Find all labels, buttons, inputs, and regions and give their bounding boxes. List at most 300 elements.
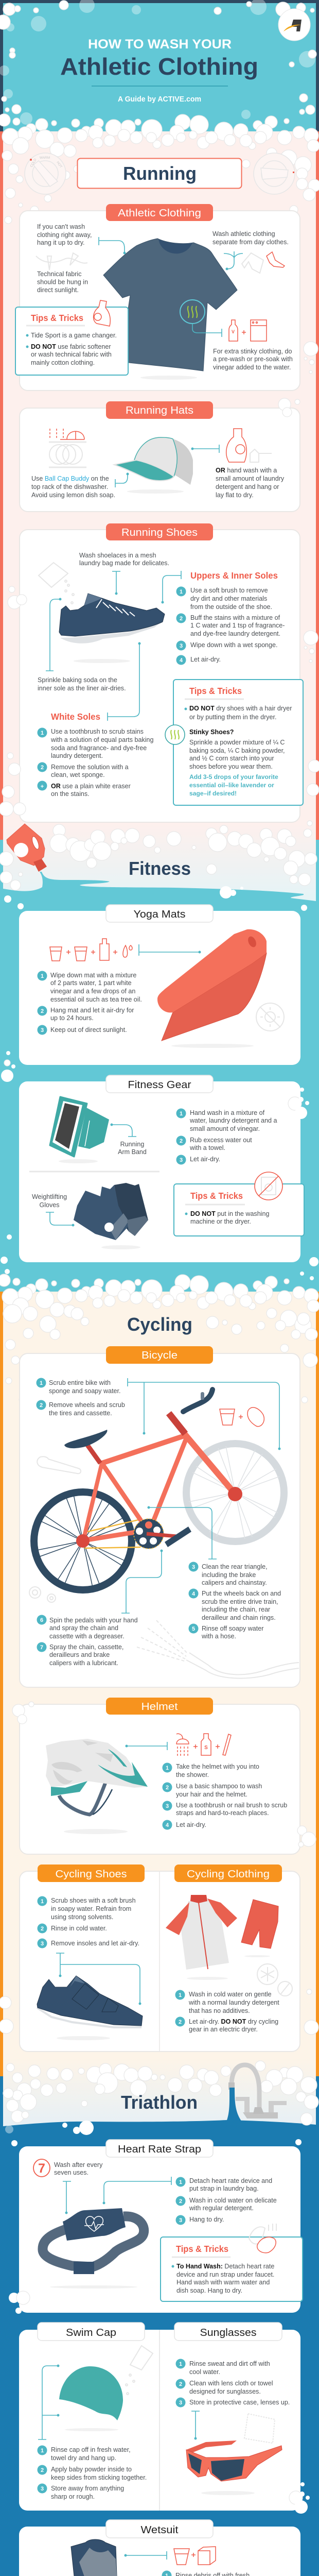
heading: Uppers and Inner Soles: Uppers & Inner Soles (190, 570, 278, 581)
tips box: mainly cotton clothing. (31, 359, 95, 366)
text: stinky: For extra stinky clothing, do (213, 348, 292, 355)
text: hang dry: clothing right away, (37, 231, 92, 239)
steps 3-5: Rinse off soapy water (202, 1625, 263, 1632)
steps 3-5: 3 (192, 1564, 195, 1570)
tips box: put in the washing (216, 1210, 269, 1217)
icon: wrench (37, 1456, 81, 1473)
icon: cold wash (257, 1964, 278, 1985)
steps: yoga: Wipe down mat with a mixture (50, 972, 136, 979)
steps: yoga: Keep out of direct sunlight. (50, 1026, 127, 1033)
icon: number seven (33, 2159, 50, 2177)
illustration: heart rate strap (43, 2208, 144, 2289)
pill heading (106, 1075, 213, 1093)
steps: cycling shoes: 2 (41, 1926, 44, 1932)
text: technical fabric: direct sunlight. (37, 286, 79, 294)
steps: cycling shoes: Remove insoles and let air-dry. (51, 1940, 139, 1947)
steps: helmet: 3 (166, 1803, 169, 1809)
text: hang dry: hang it up to dry. (37, 239, 85, 246)
icon: vinegar and washer (229, 320, 267, 341)
text: hand wash: detergent and hang or (216, 483, 279, 490)
title (60, 37, 258, 104)
steps: cycling clothing: 1 (179, 1992, 182, 1998)
connector: separate (224, 251, 243, 270)
text: hand wash: small amount of laundry (216, 475, 285, 482)
tips box: Sprinkle a powder mixture of ¼ C (189, 739, 285, 746)
steps: uppers: and dye-free laundry detergent. (190, 630, 280, 637)
connector: steps (103, 2177, 171, 2204)
tips box: baking soda, ¼ C baking powder, (189, 747, 285, 754)
text: sprinkle: Sprinkle baking soda on the (38, 676, 117, 684)
steps: helmet (163, 1763, 287, 1830)
steps: helmet: your hair and the helmet. (176, 1791, 247, 1798)
panel: Running Hats (20, 401, 300, 512)
illustration: cycling jersey (166, 1895, 237, 1980)
heading: White Soles: White Soles (51, 711, 100, 722)
connector: sunglasses (191, 2411, 200, 2440)
steps 6-7: and spray the chain and (49, 1624, 118, 1632)
steps: cycling shoes: 3 (41, 1941, 44, 1947)
connector: wetsuit (125, 2551, 167, 2560)
steps: uppers: 4 (180, 657, 183, 664)
steps 3-5: including the brake (202, 1571, 256, 1579)
icon: powder bottle (126, 2346, 153, 2395)
steps 3-5 (188, 1562, 281, 1640)
heading: Fitness: Fitness (129, 858, 191, 879)
pill heading: Cycling Clothing (187, 1869, 270, 1880)
steps: white soles: on the stains. (51, 790, 90, 798)
steps 1-2: 1 (40, 1380, 43, 1386)
icon: sock (267, 252, 285, 267)
heading: Triathlon: Triathlon (121, 2092, 198, 2113)
text: stinky: vinegar added to the water. (213, 364, 291, 371)
tips box (15, 307, 128, 375)
pill heading (106, 401, 213, 419)
steps: gear: Rub excess water out (190, 1137, 252, 1144)
steps 6-7: 7 (40, 1645, 43, 1651)
icon: number seven: 7 (38, 2161, 45, 2176)
illustration: sunglasses (186, 2441, 282, 2495)
tips box: or by putting them in the dryer. (189, 714, 276, 721)
icon: nuts (29, 1587, 56, 1602)
icon: hose (137, 1620, 299, 1679)
steps 3-5: 5 (192, 1626, 195, 1632)
icon: temperature dial: HOT (56, 161, 63, 168)
steps: gear: 1 (180, 1111, 183, 1117)
pill heading: Cycling Shoes (56, 1869, 127, 1880)
icon: temperature dial (25, 153, 66, 194)
label: arm band: Arm Band (118, 1148, 147, 1156)
connector: white soles (108, 642, 141, 721)
steps 1-2: sponge and soapy water. (49, 1387, 121, 1395)
illustration: yoga mat (157, 929, 267, 1048)
handlebar (183, 1389, 212, 1412)
steps: sunglasses: Clean with lens cloth or towel (189, 2380, 273, 2387)
steps: gear: water, laundry detergent and a (189, 1117, 277, 1124)
text: wash frequency: seven uses. (54, 2169, 88, 2176)
steps: sunglasses: designed for sunglasses. (189, 2388, 261, 2395)
steps: yoga (37, 971, 142, 1035)
tips box: Tips & Tricks (31, 313, 83, 323)
illustration: cycling shorts (241, 1900, 278, 1957)
heading: Running (77, 159, 242, 189)
steps 3-5: 4 (192, 1591, 196, 1597)
steps: swim cap: towel dry and hang up. (51, 2454, 116, 2462)
text: ball cap buddy: Use (31, 475, 45, 482)
steps: cycling shoes: in soapy water. Refrain from (51, 1905, 131, 1912)
connector: arm band (110, 1123, 136, 1137)
steps: heart rate: put strap in laundry bag. (189, 2185, 259, 2192)
bubbles: fitness foam (0, 821, 317, 911)
label: gloves: Gloves (39, 1201, 60, 1209)
icon: faucet (226, 2065, 287, 2122)
steps 3-5: derailleur and chain rings. (202, 1614, 276, 1621)
connector: hand wash (191, 445, 219, 453)
steps: sunglasses (176, 2359, 290, 2407)
panel: Wetsuit (19, 2520, 301, 2576)
steps: cycling clothing: Wash in cold water on gentle (189, 1991, 272, 1998)
illustration: cycling shoe (37, 1976, 143, 2040)
pill heading: Fitness Gear (128, 1079, 191, 1091)
tips box: To Hand Wash: (176, 2263, 223, 2270)
icon: shower shampoo brush (176, 1734, 231, 1757)
text: sprinkle: inner sole as the liner air-dries. (38, 685, 126, 692)
steps 1-2 (36, 1378, 125, 1417)
pill heading (106, 1698, 213, 1715)
steps: white soles (37, 727, 154, 798)
steps: heart rate: 1 (179, 2179, 182, 2185)
icon: temperature dial: COLD (30, 158, 38, 168)
text: shoelaces: Wash shoelaces in a mesh (79, 552, 156, 559)
tips box: dish soap. Hang to dry. (176, 2287, 242, 2294)
steps: cycling shoes (37, 1896, 139, 1948)
icon: lens cloth (244, 2414, 275, 2443)
icon: detergent (94, 300, 110, 326)
steps: uppers (176, 586, 285, 665)
pill heading (106, 2140, 213, 2157)
connector: mat (139, 944, 201, 956)
illustration: hat (114, 437, 193, 494)
steps 3-5: Clean the rear triangle, (202, 1563, 268, 1570)
steps: uppers: 1 C water and 1 tsp of fragrance- (190, 622, 285, 629)
steps: gear (176, 1109, 277, 1164)
steps: gear: small amount of vinegar. (190, 1125, 260, 1132)
tips box (165, 680, 303, 805)
steps: heart rate: Detach heart rate device and (189, 2177, 272, 2184)
steps: cycling shoes: 1 (41, 1899, 44, 1905)
pill heading: Swim Cap (66, 2327, 116, 2338)
steps: cycling clothing: Let air-dry. (189, 2018, 221, 2025)
steps: heart rate: Hang to dry. (189, 2216, 224, 2223)
steps 3-5: Put the wheels back on and (202, 1590, 281, 1597)
steps: heart rate (176, 2177, 277, 2225)
tips box: use fabric softener (56, 343, 111, 350)
steps: yoga: 1 (41, 973, 44, 979)
icon: cycle dial (254, 153, 295, 194)
pill heading: Running Shoes (121, 527, 198, 538)
pill heading (38, 2323, 145, 2341)
steps: white soles: use a plain white eraser (61, 783, 131, 790)
text: ball cap buddy: top rack of the dishwasher. (31, 483, 108, 490)
icon: no washer (255, 1172, 282, 1200)
connector: laces (112, 571, 120, 595)
steps: cycling shoes: Scrub shoes with a soft brush (51, 1897, 136, 1904)
steps 3-5: including the chain, rear (202, 1606, 270, 1613)
steps: heart rate: Wash in cold water on delicate (189, 2197, 277, 2204)
steps 6-7 (37, 1615, 138, 1667)
steps 6-7: Spray the chain, cassette, (49, 1643, 123, 1651)
steps 3-5: with a hose. (201, 1633, 236, 1640)
steps: sunglasses: 1 (179, 2361, 182, 2367)
tips box: sage–if desired! (189, 790, 237, 797)
steps: yoga: Hang mat and let it air-dry for (50, 1007, 134, 1014)
steps 1-2: Scrub entire bike with (49, 1379, 111, 1386)
pill heading: Helmet (141, 1701, 178, 1713)
tips box (174, 1184, 304, 1236)
text: hand wash: lay flat to dry. (216, 492, 254, 499)
panel: Athletic Clothing (15, 204, 300, 391)
front wheel (186, 1444, 284, 1541)
illustration: t-shirt (103, 239, 237, 380)
hubs (76, 1487, 242, 1548)
tips box: DO NOT (31, 343, 56, 350)
steps: swim cap: Store away from anything (51, 2485, 124, 2492)
connector: uppers (162, 571, 181, 604)
tips box: Hand wash with warm water and (176, 2279, 270, 2286)
bubbles: teal dots (1, 1051, 318, 1280)
text: technical fabric: Technical fabric (37, 270, 81, 278)
connector: cycling shoe (56, 1953, 141, 2005)
steps: heart rate: 2 (179, 2198, 182, 2205)
tips box (161, 2237, 303, 2301)
steps: heart rate: 3 (179, 2217, 182, 2224)
steps: sunglasses: Store in protective case, lenses up. (189, 2399, 290, 2406)
pill heading: Running Hats (126, 405, 193, 416)
steps 1-2: Remove wheels and scrub (49, 1401, 125, 1409)
label: arm band: Running (120, 1141, 144, 1148)
steps: gear: 2 (180, 1138, 183, 1144)
steps: yoga: of 2 parts water, 1 part white (50, 979, 132, 987)
steps: white soles: clean, wet sponge. (51, 771, 105, 778)
icon: mixture (50, 939, 132, 961)
panel: Yoga Mats (19, 905, 300, 1065)
steps: yoga: up to 24 hours. (50, 1014, 94, 1022)
illustration: running shoe (59, 594, 165, 663)
saddle (64, 1430, 107, 1448)
connector: rear triangle (147, 1506, 217, 1559)
steps: swim cap: 3 (41, 2486, 44, 2492)
steps: white soles: soda and fragrance- and dye-free (51, 744, 147, 752)
chain (84, 1520, 140, 1548)
stem and seatpost (87, 1413, 185, 1463)
steps: swim cap: Apply baby powder inside to (51, 2466, 132, 2473)
steps: white soles: 1 (41, 730, 44, 736)
text: stinky: a pre-wash or pre-soak with (213, 355, 293, 363)
steps: uppers: from the outside of the shoe. (190, 603, 272, 611)
steps: cycling clothing: with a normal laundry detergent (188, 1999, 279, 2006)
steps: cycling clothing: gear in an electric dryer. (189, 2026, 258, 2033)
text: separate: separate from day clothes. (212, 239, 289, 246)
steps: uppers: 2 (180, 616, 183, 622)
steps: helmet: 1 (166, 1765, 169, 1771)
steps: cycling clothing: DO NOT dry cycling (221, 2018, 278, 2025)
panel: Heart Rate Strap (19, 2140, 303, 2313)
pill heading (38, 1865, 145, 1882)
title: A Guide by ACTIVE.com (118, 95, 201, 104)
tips box: Tide Sport is a game changer. (31, 332, 117, 339)
icon: baking soda box (39, 563, 74, 604)
steps: sunglasses: Rinse sweat and dirt off with (189, 2360, 270, 2367)
icon: cup and sponge (220, 1408, 264, 1427)
header bubbles (0, 0, 319, 224)
steps: wetsuit (162, 2571, 269, 2576)
steps: cycling clothing (175, 1990, 279, 2033)
icon: shorts (242, 253, 263, 273)
steps 6-7: calipers with a lubricant. (49, 1659, 118, 1667)
steps: uppers: Use a soft brush to remove (190, 587, 268, 594)
steps: helmet: 4 (166, 1822, 169, 1828)
steps: cycling shoes: Rinse in cold water. (51, 1925, 107, 1932)
steps: swim cap: 2 (41, 2467, 44, 2473)
icon: vinegar and washer: V (232, 329, 235, 334)
tips box: and ½ C corn starch into your (189, 755, 274, 762)
steps: white soles: Use a toothbrush to scrub stains (51, 728, 144, 735)
pill heading: Heart Rate Strap (118, 2144, 201, 2155)
steps: helmet: Use a toothbrush or nail brush to scrub (176, 1802, 287, 1809)
steps: sunglasses: cool water. (189, 2368, 220, 2376)
tips box: Tips & Tricks (189, 686, 242, 696)
pill heading (106, 204, 213, 221)
steps: swim cap (37, 2445, 147, 2500)
steps: gear: Let air-dry. (190, 1156, 220, 1163)
steps: white soles: with a solution of equal parts baking (50, 736, 154, 743)
text: wash frequency: Wash after every (54, 2161, 103, 2168)
steps: swim cap: 1 (41, 2448, 44, 2454)
connector: stink (192, 324, 222, 337)
pill heading (106, 2520, 213, 2538)
steps: swim cap: Rinse cap off in fresh water, (51, 2446, 131, 2453)
tips box: Stinky Shoes? (189, 728, 234, 736)
text: technical fabric: should be hung in (37, 278, 88, 285)
connector: helmet (126, 1742, 167, 1750)
text: separate: Wash athletic clothing (212, 230, 275, 238)
tips box: DO NOT (189, 705, 215, 712)
illustration: helmet (46, 1739, 148, 1834)
text: ball cap buddy: Avoid using lemon dish soap. (31, 492, 115, 499)
steps: uppers: dry dirt and other materials (190, 595, 267, 602)
heading: Cycling: Cycling (127, 1314, 192, 1335)
pill heading: Wetsuit (141, 2524, 179, 2536)
chainring and crank (134, 1519, 191, 1549)
steps: uppers: Let air-dry. (190, 656, 221, 663)
title: Athletic Clothing (60, 53, 258, 80)
steps 3-5: calipers and chainstay. (202, 1579, 267, 1586)
title: HOW TO WASH YOUR (88, 37, 232, 52)
steps 6-7: derailleurs and brake (49, 1651, 110, 1658)
steps: swim cap: keep sides from sticking together. (51, 2474, 147, 2481)
icon: cup and box (174, 2547, 216, 2565)
tips box: essential oil–like lavender or (189, 782, 274, 789)
icon: temperature dial: WARM (40, 156, 50, 160)
steps: cycling clothing: that has no additives. (189, 2007, 250, 2014)
tips box: Detach heart rate (223, 2263, 274, 2270)
steps 6-7: Spin the pedals with your hand (49, 1617, 138, 1624)
connector: drive train (121, 1550, 163, 1613)
steps 6-7: cassette with a degreaser. (49, 1633, 125, 1640)
rear wheel (34, 1492, 132, 1590)
bubbles: running sides (0, 342, 319, 816)
steps 1-2: the tires and cassette. (49, 1410, 112, 1417)
pill heading (106, 523, 213, 540)
logo badge (278, 9, 310, 41)
steps: uppers: Wipe down with a wet sponge. (190, 641, 277, 649)
tips box: machine or the dryer. (190, 1218, 251, 1225)
tips box: device and run strap under faucet. (176, 2271, 274, 2278)
steps: cycling shoes: using strong solvents. (51, 1913, 113, 1921)
steps: heart rate: with regular detergent. (189, 2205, 254, 2212)
tips box: or wash technical fabric with (31, 351, 112, 358)
steps: swim cap: sharp or rough. (51, 2493, 95, 2500)
steps: yoga: 2 (41, 1008, 44, 1014)
steps: uppers: 1 (180, 589, 183, 595)
connector: gloves (46, 1212, 74, 1226)
illustration: wetsuit (71, 2539, 119, 2576)
text: ball cap buddy: Ball Cap Buddy on the (45, 475, 109, 482)
pill heading: Bicycle (141, 1350, 178, 1361)
panel: Running Shoes (20, 523, 303, 822)
connector: swim cap (38, 2365, 60, 2439)
panel: Cycling Shoes and Clothing (20, 1865, 300, 2052)
steps: yoga: vinegar and a few drops of an (50, 988, 135, 995)
steps: gear: 3 (180, 1157, 183, 1163)
tips box: DO NOT (190, 1210, 216, 1217)
icon: dishwasher rack (49, 429, 86, 467)
steps: white soles: + (41, 784, 44, 790)
illustration: gloves (74, 1183, 148, 1249)
text: hand wash: hand wash with a (225, 467, 277, 474)
steps: white soles: laundry detergent. (51, 752, 103, 759)
steps: yoga: 3 (41, 1027, 44, 1033)
smell circle (180, 300, 205, 324)
bubbles: blue section clusters (9, 2139, 310, 2514)
panel: Swim Cap and Sunglasses (19, 2323, 300, 2511)
pill heading (174, 1865, 282, 1882)
connector: hang (99, 237, 126, 255)
panel: Bicycle (20, 1346, 300, 1687)
icon: clothes pins (36, 253, 87, 270)
connector: sprinkle (46, 598, 62, 671)
illustration: swim cap (59, 2366, 123, 2431)
bubbles: triathlon foam (3, 2061, 318, 2135)
icon: hand and sponge (249, 2224, 276, 2253)
label: gloves: Weightlifting (32, 1193, 67, 1200)
connector: frequency (63, 2181, 71, 2214)
tips box: Add 3-5 drops of your favorite (189, 773, 278, 781)
steps: helmet: the shower. (176, 1771, 209, 1778)
steps 3-5: scrub the entire drive train, (202, 1598, 278, 1605)
steps: white soles: Remove the solution with a (51, 764, 129, 771)
steps: sunglasses: 2 (179, 2381, 182, 2387)
steps: white soles: 2 (41, 765, 44, 771)
text: hang dry: If you can't wash (37, 223, 85, 230)
steps: gear: Hand wash in a mixture of (190, 1109, 265, 1116)
heading: Running: Running (123, 163, 197, 184)
steps: sunglasses: 3 (179, 2400, 182, 2406)
pill heading: Yoga Mats (134, 909, 185, 920)
pill heading (106, 1346, 213, 1364)
connector: rack (115, 473, 129, 487)
pill heading (106, 905, 213, 922)
tips box: shoes before you wear them. (189, 763, 273, 770)
